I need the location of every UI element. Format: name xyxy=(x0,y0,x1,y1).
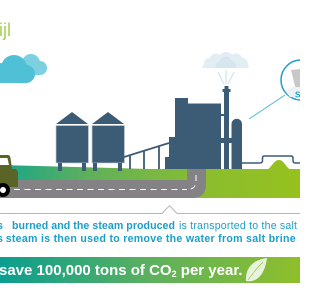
factory building xyxy=(165,98,221,169)
banner text: per year. xyxy=(177,262,242,279)
description text: steam is then used to remove the water from salt brine xyxy=(6,233,296,245)
ground xyxy=(0,165,300,198)
pipeline xyxy=(242,156,300,163)
divider with notch xyxy=(0,206,300,214)
icon: leaf xyxy=(246,258,267,281)
description text: is transported to the salt xyxy=(179,220,297,232)
smoke rays xyxy=(218,70,234,84)
road markings xyxy=(14,175,196,190)
banner text: save 100,000 tons of CO xyxy=(0,262,172,279)
conveyor xyxy=(124,143,169,169)
icon: truck xyxy=(0,155,18,197)
connectors xyxy=(221,114,232,143)
savings banner xyxy=(0,257,300,283)
chimney xyxy=(222,86,230,169)
hill xyxy=(265,160,293,170)
banner text: 2 xyxy=(172,269,177,279)
description text xyxy=(0,220,297,245)
smoke cloud xyxy=(202,52,249,68)
silos xyxy=(56,112,124,171)
callout: salt xyxy=(281,60,320,100)
icon: teal cloud xyxy=(0,54,47,83)
description text: burned and the steam produced xyxy=(12,220,175,232)
road xyxy=(0,169,206,198)
tower xyxy=(232,119,242,169)
callout line xyxy=(249,95,285,119)
